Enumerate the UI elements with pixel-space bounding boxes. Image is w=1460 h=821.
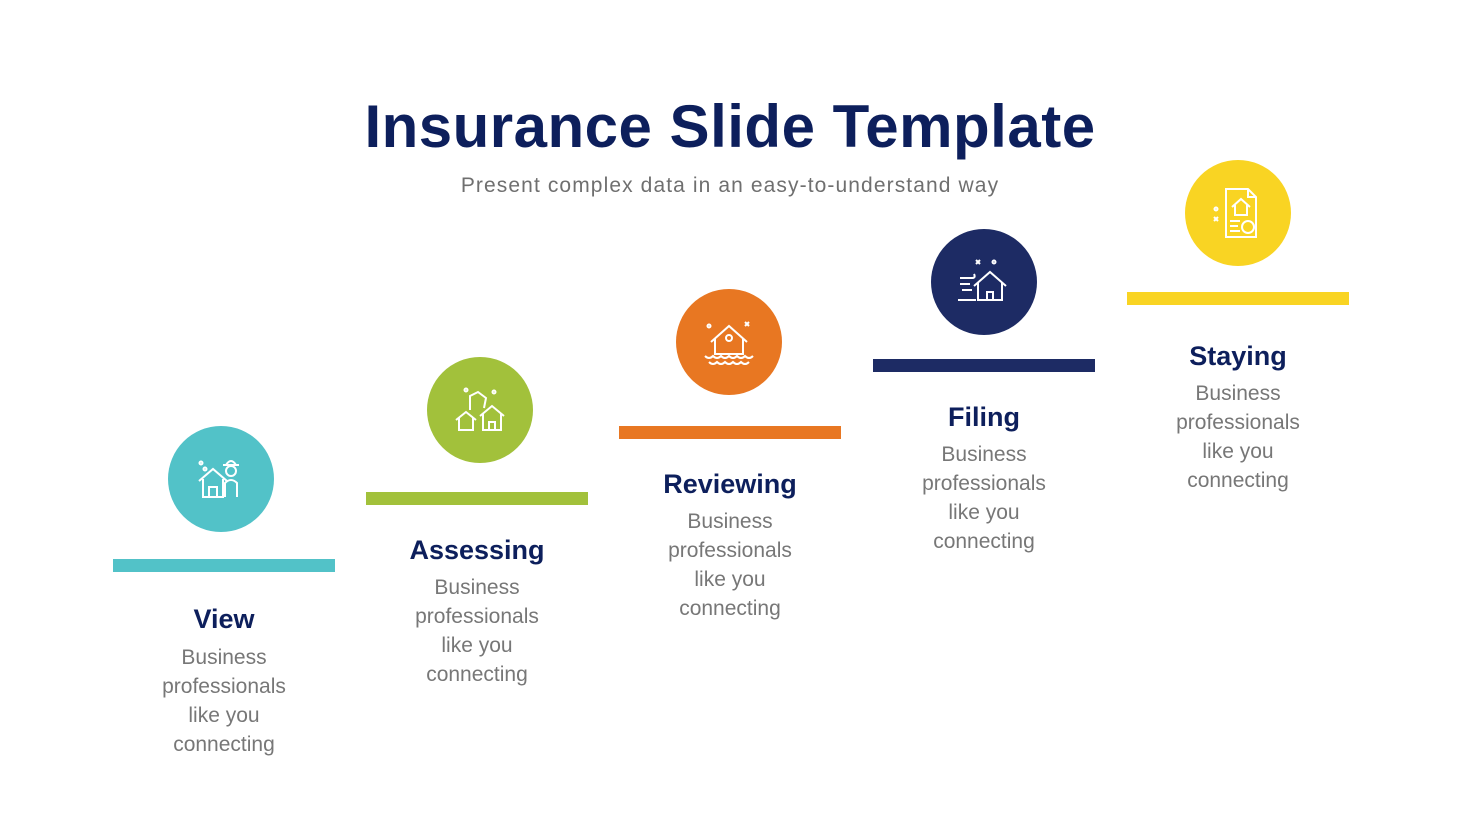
step: Staying xyxy=(1127,160,1349,492)
title: Insurance Slide Template xyxy=(364,93,1096,160)
text xyxy=(1176,382,1300,492)
text: professionals xyxy=(668,539,792,562)
text xyxy=(668,510,792,620)
text: Business xyxy=(941,443,1027,466)
text xyxy=(922,443,1046,553)
text: like you xyxy=(694,568,766,591)
text: Business xyxy=(1195,382,1281,405)
text: like you xyxy=(188,704,260,727)
step: Reviewing xyxy=(619,289,841,620)
heading: Assessing xyxy=(409,535,545,565)
text: professionals xyxy=(415,605,539,628)
icon: storm house xyxy=(931,229,1037,335)
bar xyxy=(113,559,335,572)
bar xyxy=(1127,292,1349,305)
text xyxy=(415,576,539,686)
text: professionals xyxy=(922,472,1046,495)
text: connecting xyxy=(679,597,781,620)
bar xyxy=(366,492,588,505)
icon: person house circle xyxy=(168,426,274,532)
text: connecting xyxy=(1187,469,1289,492)
step: View xyxy=(113,426,335,756)
text: like you xyxy=(441,634,513,657)
icon: damaged houses xyxy=(427,357,533,463)
text xyxy=(162,646,286,756)
text: Business xyxy=(181,646,267,669)
heading: Staying xyxy=(1189,341,1287,371)
step: Assessing xyxy=(366,357,588,686)
text: like you xyxy=(948,501,1020,524)
icon: house document xyxy=(1185,160,1291,266)
text: like you xyxy=(1202,440,1274,463)
text: Business xyxy=(687,510,773,533)
heading: View xyxy=(193,604,255,634)
heading: Reviewing xyxy=(663,469,797,499)
step: Filing xyxy=(873,229,1095,553)
text: connecting xyxy=(426,663,528,686)
text: Business xyxy=(434,576,520,599)
subtitle: Present complex data in an easy-to-understand way xyxy=(461,174,999,197)
icon: flooded house xyxy=(676,289,782,395)
bar xyxy=(873,359,1095,372)
heading: Filing xyxy=(948,402,1020,432)
text: professionals xyxy=(1176,411,1300,434)
text: professionals xyxy=(162,675,286,698)
bar xyxy=(619,426,841,439)
text: connecting xyxy=(933,530,1035,553)
text: connecting xyxy=(173,733,275,756)
